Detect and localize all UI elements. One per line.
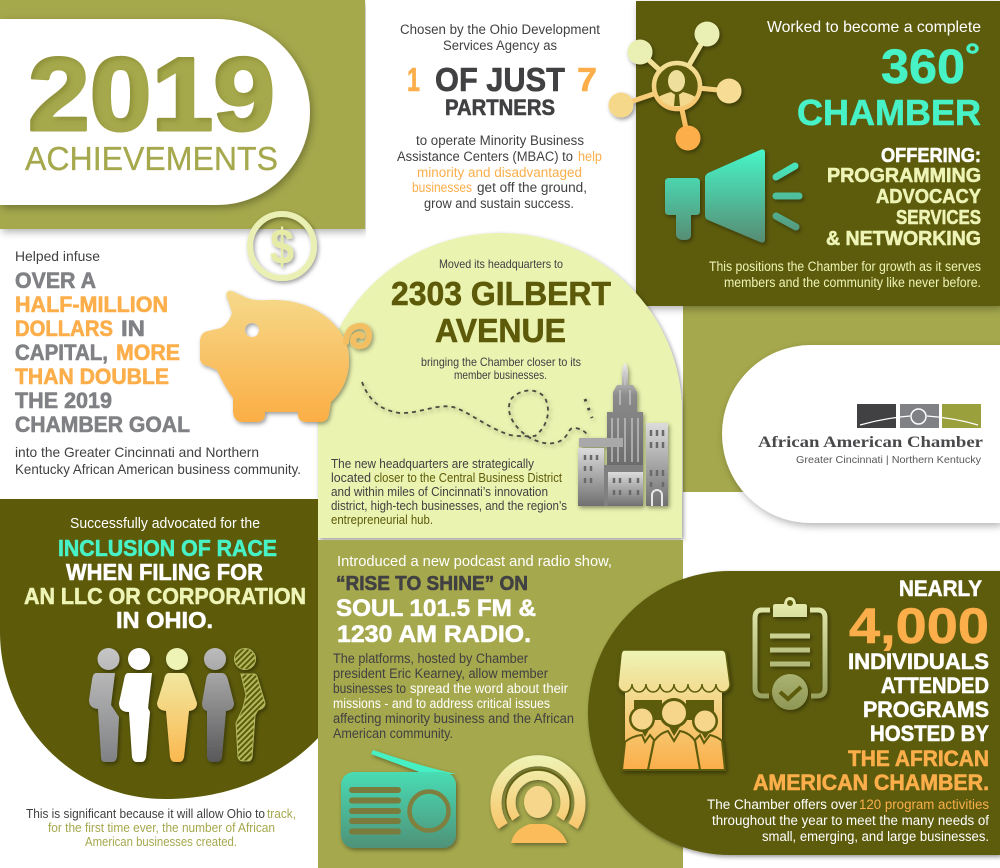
text: partners: businesses bbox=[412, 180, 472, 195]
text: attendance: AMERICAN CHAMBER. bbox=[753, 770, 989, 795]
text: attendance: INDIVIDUALS bbox=[848, 649, 989, 674]
text: 360 chamber: SERVICES bbox=[896, 207, 981, 229]
text: partners bbox=[397, 22, 602, 211]
text: partners: Assistance Centers (MBAC) to bbox=[397, 149, 573, 164]
headline: 1 of just 7: OF JUST bbox=[435, 61, 565, 98]
logo region: Greater Cincinnati | Northern Kentucky bbox=[796, 454, 982, 466]
panel: headquarters arch bbox=[318, 233, 682, 538]
text: partners: PARTNERS bbox=[445, 95, 555, 120]
logo name: African American Chamber bbox=[758, 434, 983, 451]
text: chamber goal: MORE bbox=[116, 340, 180, 365]
icon: dollar coin: $ bbox=[270, 219, 294, 275]
text: inclusion significance: This is significant because it will allow Ohio to bbox=[26, 807, 265, 821]
text: chamber goal: into the Greater Cincinnati and Northern bbox=[15, 444, 259, 460]
text: podcast: 1230 AM RADIO. bbox=[337, 621, 531, 648]
text: headquarters: Moved its headquarters to bbox=[439, 257, 563, 271]
logo mark bbox=[857, 404, 981, 428]
text: headquarters: AVENUE bbox=[435, 312, 566, 349]
text: attendance bbox=[707, 576, 989, 844]
text: chamber goal: CAPITAL, bbox=[15, 340, 108, 365]
panel: inclusion of race shape bbox=[0, 499, 318, 799]
panel: attendance shape bbox=[588, 571, 1000, 855]
text: attendance: THE AFRICAN bbox=[848, 746, 989, 771]
icon: clipboard bbox=[755, 597, 825, 710]
text: inclusion of race: INCLUSION OF RACE bbox=[58, 535, 277, 561]
text: partners: Chosen by the Ohio Development bbox=[400, 22, 600, 37]
text: inclusion of race: WHEN FILING FOR bbox=[66, 559, 263, 585]
icon: storefront with people bbox=[618, 650, 730, 770]
text: 360 chamber bbox=[709, 19, 982, 290]
text: inclusion significance bbox=[26, 807, 296, 849]
panel: podcast background bbox=[318, 540, 683, 868]
headline: 1 of just 7: 1 bbox=[407, 61, 420, 98]
title year: 2019 bbox=[28, 37, 275, 153]
text: headquarters: and within miles of Cincinnati’s innovation bbox=[331, 484, 548, 499]
icon: radio bbox=[341, 750, 456, 848]
text: 360 chamber: ADVOCACY bbox=[876, 186, 982, 208]
text: inclusion of race: AN LLC OR CORPORATION bbox=[24, 583, 306, 609]
title word: ACHIEVEMENTS bbox=[25, 140, 278, 177]
text: headquarters: member businesses. bbox=[454, 368, 547, 382]
text: chamber goal bbox=[15, 248, 301, 477]
text: attendance: NEARLY bbox=[899, 576, 982, 601]
icon: piggy bank bbox=[200, 291, 369, 422]
text: attendance: small, emerging, and large businesses. bbox=[762, 829, 989, 844]
text: attendance: throughout the year to meet the many needs of bbox=[712, 813, 989, 828]
text: partners: grow and sustain success. bbox=[424, 196, 574, 211]
text: chamber goal: DOLLARS bbox=[15, 316, 113, 341]
pill shape bbox=[0, 19, 310, 205]
text: partners: minority and disadvantaged bbox=[417, 165, 582, 180]
text: attendance: HOSTED BY bbox=[870, 721, 989, 746]
text: inclusion significance: for the first time ever, the number of African bbox=[48, 821, 275, 835]
text: chamber goal: CHAMBER GOAL bbox=[15, 412, 190, 437]
text: headquarters: district, high-tech businesses, and the region’s bbox=[331, 498, 567, 513]
text: inclusion of race: Successfully advocated for the bbox=[70, 516, 260, 532]
text: attendance: The Chamber offers over bbox=[707, 797, 857, 812]
text: attendance: ATTENDED bbox=[881, 673, 989, 698]
text: chamber goal: THAN DOUBLE bbox=[15, 364, 169, 389]
icon: city buildings bbox=[578, 363, 668, 506]
text: podcast: “RISE TO SHINE” ON bbox=[336, 573, 528, 595]
text: podcast: American community. bbox=[333, 726, 453, 741]
text: inclusion significance: track, bbox=[267, 807, 296, 821]
logo pill bbox=[722, 345, 1000, 523]
text: 360 chamber: & NETWORKING bbox=[826, 228, 981, 250]
text: podcast: businesses to bbox=[333, 681, 406, 696]
text: chamber goal: IN bbox=[121, 316, 145, 341]
text: partners: get off the ground, bbox=[477, 180, 587, 195]
text: partners: Services Agency as bbox=[443, 38, 557, 53]
text: podcast bbox=[333, 553, 612, 741]
icon: dollar coin bbox=[250, 214, 314, 278]
headline: 1 of just 7: 7 bbox=[577, 61, 597, 98]
text: podcast: spread the word about their bbox=[410, 681, 568, 696]
text: 360 chamber: PROGRAMMING bbox=[827, 165, 981, 187]
pill shape bbox=[722, 345, 1000, 523]
panel: title background bbox=[0, 0, 365, 229]
text: podcast: president Eric Kearney, allow member bbox=[333, 666, 548, 681]
text: chamber goal: THE 2019 bbox=[15, 388, 112, 413]
icon: dashed route bbox=[362, 382, 592, 443]
text: 360 chamber: CHAMBER bbox=[797, 92, 981, 133]
panel: partners background bbox=[366, 0, 636, 240]
panel: 360 chamber background bbox=[636, 1, 1000, 306]
text: podcast: The platforms, hosted by Chamber bbox=[333, 651, 528, 666]
text: chamber goal: Helped infuse bbox=[15, 248, 100, 264]
panel: logo backdrop bbox=[683, 306, 1000, 492]
text: partners: to operate Minority Business bbox=[416, 133, 584, 148]
text: podcast: affecting minority business and the African bbox=[333, 711, 574, 726]
text: headquarters: The new headquarters are strategically bbox=[331, 456, 534, 471]
text: inclusion significance: American businesses created. bbox=[85, 835, 237, 849]
text: headquarters: 2303 GILBERT bbox=[391, 275, 611, 312]
text: attendance: 120 program activities bbox=[859, 797, 989, 812]
text: chamber goal: OVER A bbox=[15, 268, 96, 293]
text: podcast: SOUL 101.5 FM & bbox=[336, 595, 536, 622]
text: inclusion of race: IN OHIO. bbox=[116, 607, 213, 633]
text: headquarters: bringing the Chamber closer to its bbox=[421, 355, 581, 369]
icon: five people bbox=[89, 648, 265, 762]
panel: chamber goal background bbox=[0, 229, 365, 499]
text: podcast: Introduced a new podcast and radio show, bbox=[337, 553, 612, 570]
text: chamber goal: Kentucky African American business community. bbox=[15, 461, 301, 477]
icon: megaphone bbox=[665, 149, 799, 243]
text: attendance: 4,000 bbox=[849, 598, 989, 654]
text: headquarters: entrepreneurial hub. bbox=[331, 512, 433, 527]
text: inclusion of race bbox=[24, 516, 306, 633]
text: headquarters bbox=[331, 257, 611, 527]
icon: podcast bbox=[496, 761, 580, 843]
text: 360 chamber: ° bbox=[965, 37, 980, 73]
text: 360 chamber: OFFERING: bbox=[881, 145, 981, 167]
text: headquarters: closer to the Central Business District bbox=[374, 470, 562, 485]
text: partners: help bbox=[578, 149, 602, 164]
text: podcast: missions - and to address critical issues bbox=[333, 696, 550, 711]
text: 360 chamber: 360 bbox=[881, 41, 965, 94]
text: 360 chamber: members and the community like never before. bbox=[724, 275, 981, 290]
text: 360 chamber: Worked to become a complete bbox=[767, 19, 981, 36]
icon: network bbox=[608, 22, 742, 150]
title pill bbox=[0, 19, 310, 205]
text: attendance: PROGRAMS bbox=[863, 697, 989, 722]
text: headquarters: located bbox=[331, 470, 371, 485]
text: chamber goal: HALF-MILLION bbox=[15, 292, 168, 317]
